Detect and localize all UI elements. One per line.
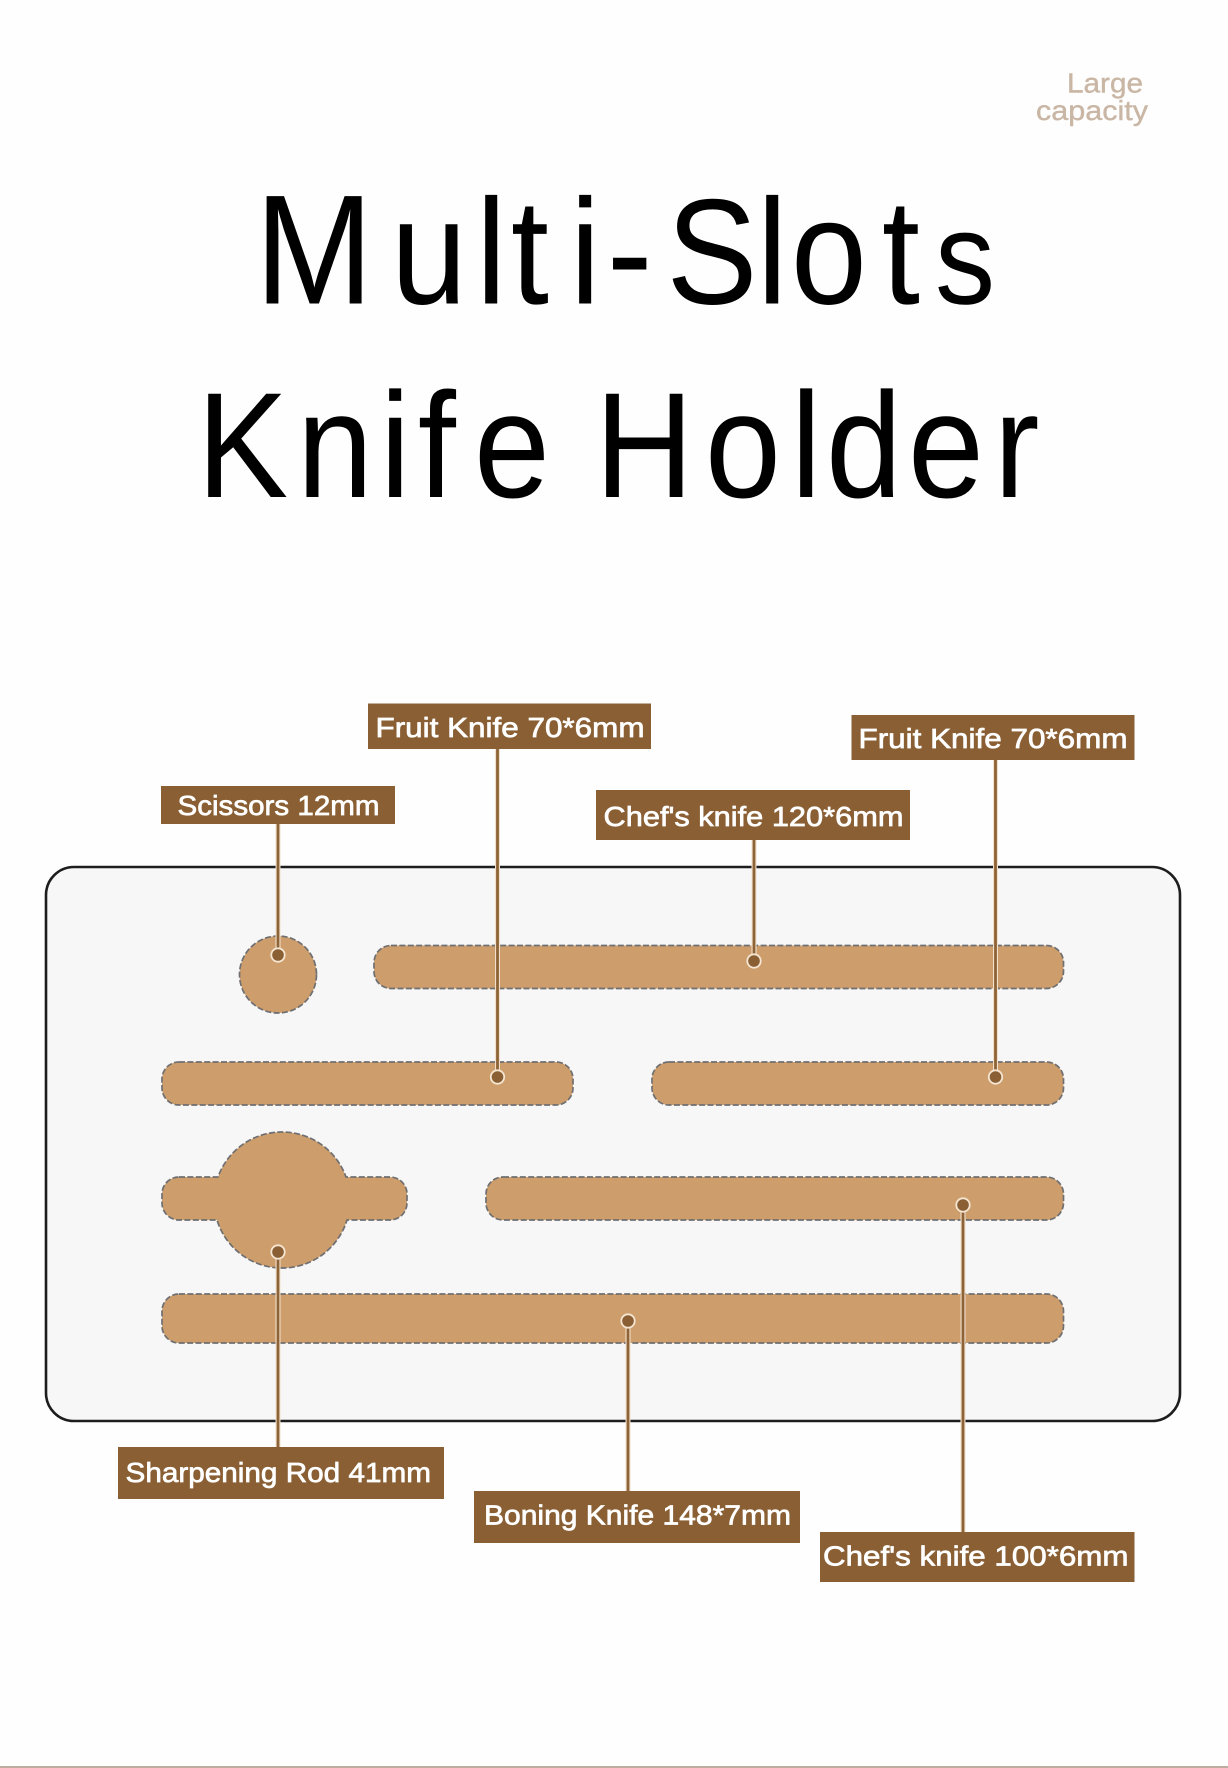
title: ulti-Slot: [391, 169, 920, 336]
callout: Scissors 12mm: Scissors 12mm: [178, 790, 380, 821]
callout: Boning Knife 148*7mm: [474, 1313, 800, 1543]
callout: Fruit Knife 70*6mm right: Fruit Knife 70*6mm: [858, 723, 1128, 754]
callout: Fruit Knife 70*6mm right: [852, 715, 1134, 1085]
callout: Chef's knife 120*6mm: Chef's knife 120*6mm: [604, 801, 904, 832]
panel: knife holder top view: [46, 867, 1180, 1421]
title: Knife Holder: [197, 362, 1039, 529]
caption: Large capacity: [1036, 68, 1148, 126]
slot: fruit knife left: [162, 1062, 573, 1105]
callout: Boning Knife 148*7mm: Boning Knife 148*7mm: [484, 1500, 791, 1530]
callout: Sharpening Rod 41mm: Sharpening Rod 41mm: [126, 1457, 431, 1488]
slot: sharpening rod: [162, 1132, 407, 1268]
callout: Scissors 12mm: [161, 786, 395, 963]
slot: chef's knife 120: [374, 946, 1064, 988]
callout: Chef's knife 100*6mm: [820, 1197, 1134, 1582]
slot: boning knife: [162, 1294, 1064, 1343]
callout: Chef's knife 120*6mm: [596, 790, 910, 969]
slot: chef's knife 100: [486, 1177, 1064, 1220]
slot: scissors: [240, 936, 316, 1013]
caption: Large capacity: capacity: [1036, 95, 1148, 126]
slot: fruit knife right: [652, 1062, 1064, 1105]
caption: Large capacity: Large: [1067, 68, 1143, 99]
title: M: [255, 162, 373, 337]
callout: Sharpening Rod 41mm: [118, 1244, 444, 1499]
title: [197, 162, 1039, 529]
callout: Chef's knife 100*6mm: Chef's knife 100*6mm: [823, 1540, 1128, 1572]
callout: Fruit Knife 70*6mm left: Fruit Knife 70*6mm: [376, 712, 644, 743]
title: s: [935, 184, 995, 332]
callout: Fruit Knife 70*6mm left: [368, 704, 651, 1085]
